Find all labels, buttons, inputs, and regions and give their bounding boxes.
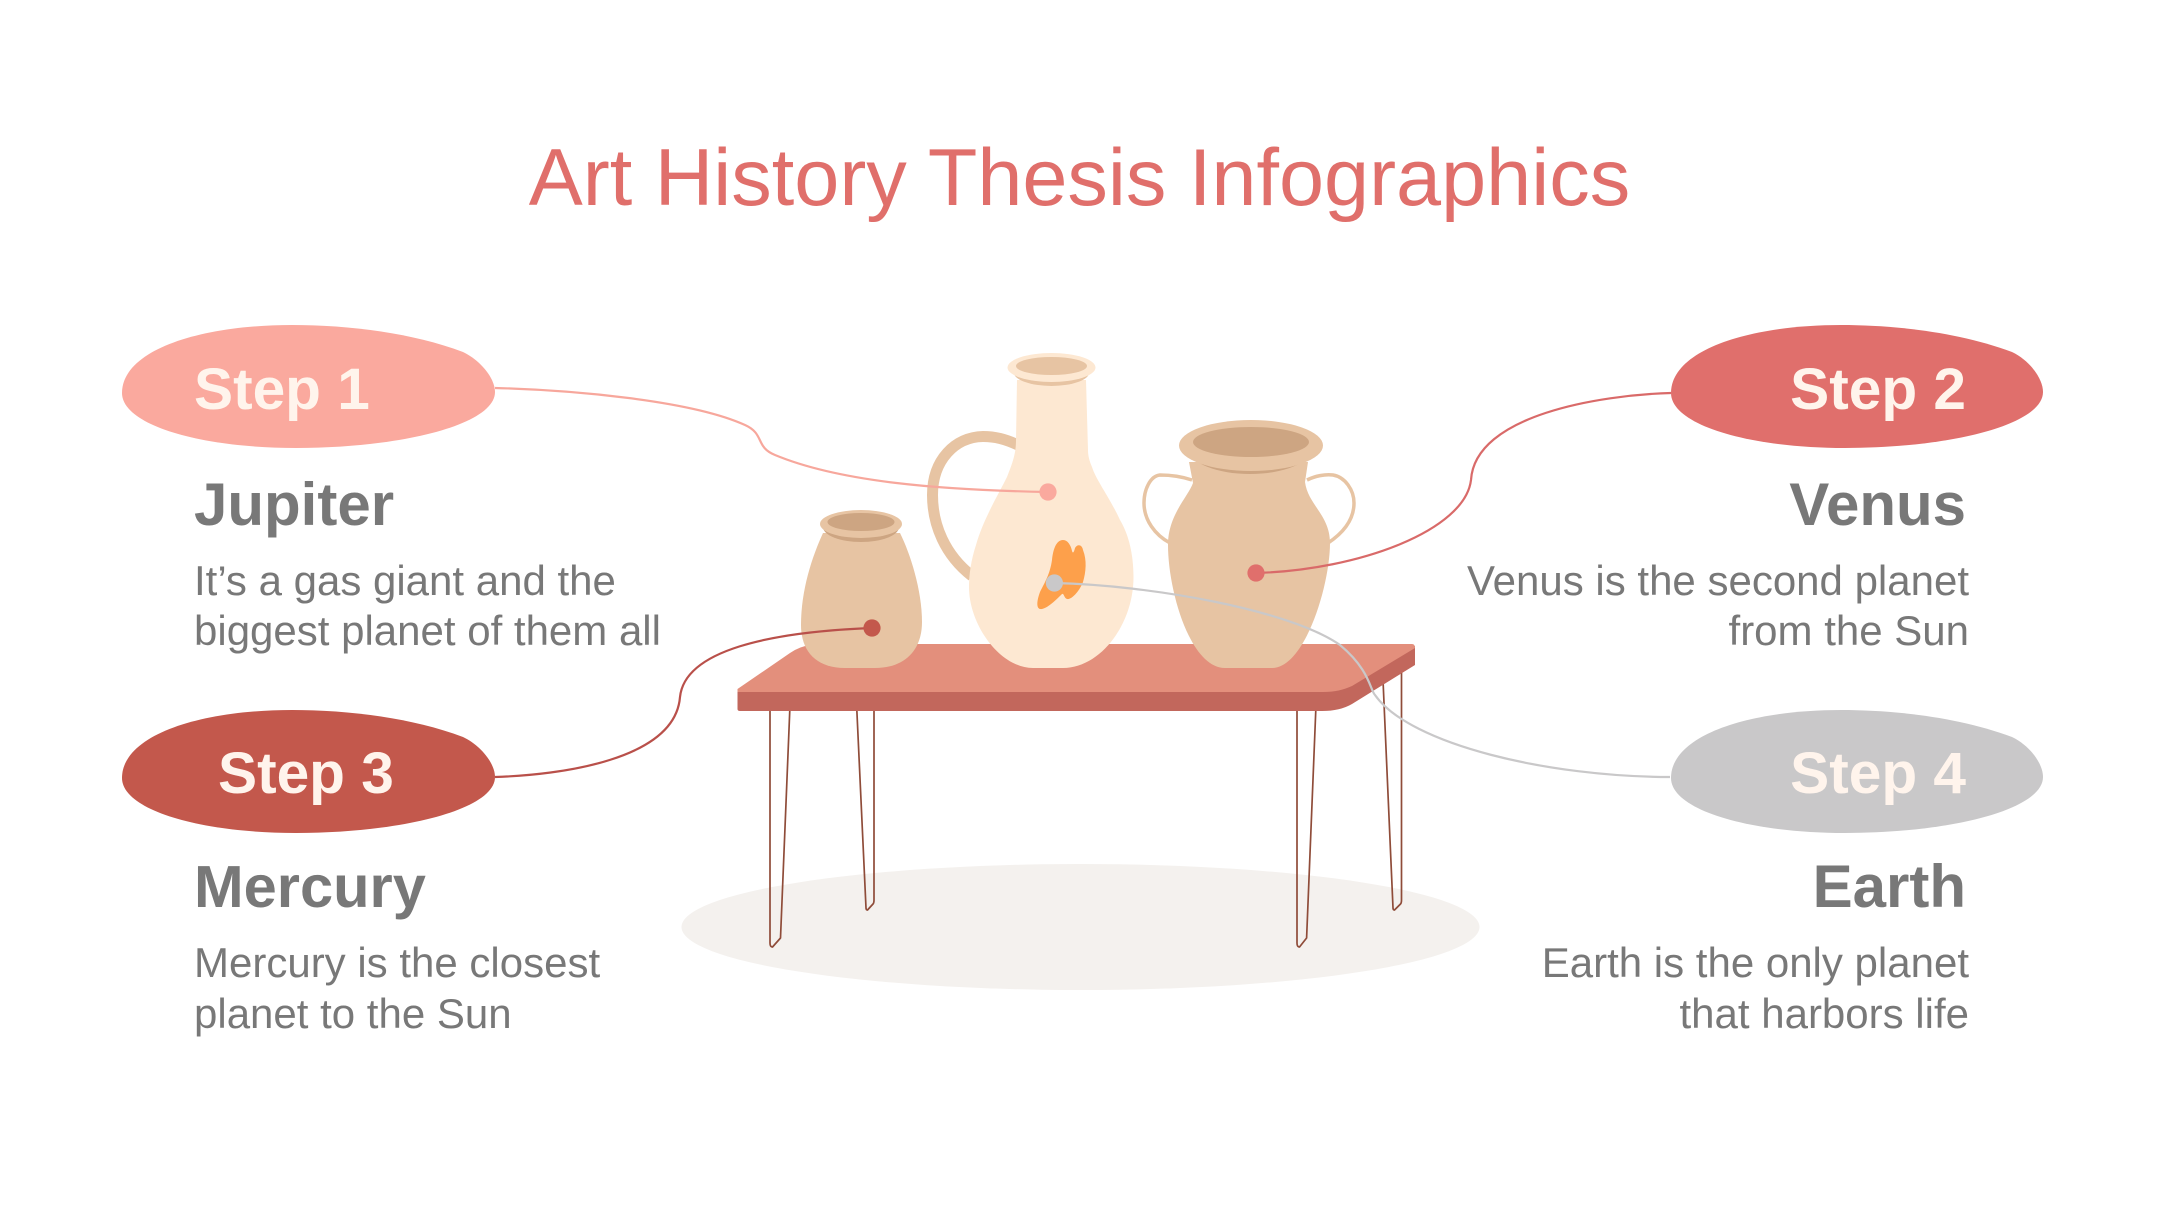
jug handle — [932, 436, 1018, 576]
panel: step 2 Venus — [1467, 325, 2043, 654]
heading: Earth: Earth — [1813, 853, 1966, 920]
description: Mercury: planet to the Sun — [194, 990, 512, 1037]
pill: step 4 — [1671, 710, 2043, 833]
connector: step 1 — [495, 388, 1057, 501]
connector: step 2 — [1247, 393, 1671, 582]
table legs — [770, 670, 1402, 947]
panel: step 1 Jupiter — [122, 325, 661, 654]
vase handles — [1144, 475, 1192, 543]
small vase — [801, 510, 922, 668]
table side and front — [738, 646, 1415, 711]
title: Art History Thesis Infographics — [529, 133, 1630, 223]
tall jug — [932, 353, 1134, 668]
description: Jupiter: It’s a gas giant and the — [194, 557, 616, 604]
pill: step 1 — [122, 325, 495, 448]
description: Earth: Earth is the only planet — [1542, 939, 1969, 986]
connector: step 3 — [495, 619, 881, 777]
heading: Mercury: Mercury — [194, 853, 426, 920]
label: step 2: Step 2 — [1790, 357, 1966, 422]
description: Venus: Venus is the second planet — [1467, 557, 1969, 604]
heading: Venus: Venus — [1789, 471, 1966, 538]
pill: step 3 — [122, 710, 495, 833]
panel: step 4 Earth — [1542, 710, 2043, 1037]
table top — [738, 644, 1415, 692]
label: step 3: Step 3 — [218, 741, 394, 806]
floor shadow — [682, 864, 1480, 990]
description: Jupiter: biggest planet of them all — [194, 607, 661, 654]
connector: step 4 — [1046, 574, 1670, 777]
description: Earth: that harbors life — [1680, 990, 1969, 1037]
description: Mercury: Mercury is the closest — [194, 939, 600, 986]
label: step 1: Step 1 — [194, 357, 370, 422]
description: Venus: from the Sun — [1729, 607, 1969, 654]
panel: step 3 Mercury — [122, 710, 600, 1037]
heading: Jupiter: Jupiter — [194, 471, 394, 538]
large two-handled vase — [1144, 420, 1354, 668]
label: step 4: Step 4 — [1790, 741, 1966, 806]
pill: step 2 — [1671, 325, 2043, 448]
table — [738, 644, 1415, 947]
orange flower — [1037, 540, 1086, 609]
